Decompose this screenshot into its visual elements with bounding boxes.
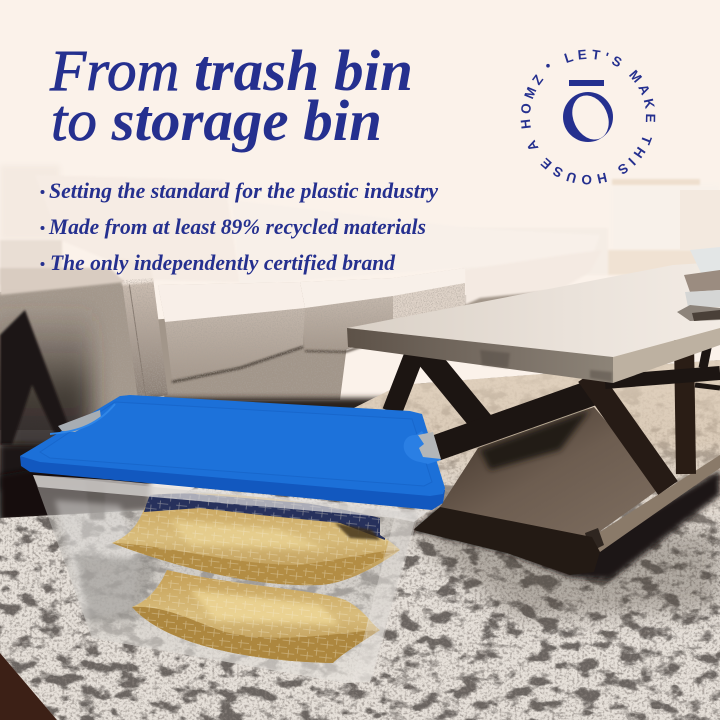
shelf front edge [582,455,720,552]
top gold pillow [112,493,400,586]
lid top [20,395,445,496]
second cushion [300,278,393,350]
bullet 2: Made from at least 89% recycled materials [48,214,426,239]
coffee table [347,262,720,580]
storage bin [20,395,445,683]
bin body, clear plastic [33,475,417,683]
bottom gold pillow [132,570,380,663]
slogan dot [546,64,550,68]
sofa back cushions [35,175,240,282]
right latch [404,431,441,464]
lid lip [20,456,445,510]
bullet list [40,178,438,275]
title: to storage bin [51,88,382,153]
lid inner recess [40,402,432,486]
bin rim under lid [33,475,428,522]
third cushion [393,268,465,333]
table legs [392,338,720,488]
stack of books [677,247,720,321]
far cushion [465,250,602,305]
bullet 3: The only independently certified brand [50,250,396,275]
side table, dark and faded [0,240,395,525]
wood floor [0,653,57,720]
bullet 1: Setting the standard for the plastic industry [49,178,438,203]
sofa base [150,285,590,400]
table shadow [413,470,720,580]
left latch [58,410,101,432]
logo mark: o with macron [563,80,616,146]
title: From trash bin [49,38,413,103]
fabric texture [122,278,465,396]
logo badge [520,50,656,184]
rug [0,355,720,720]
side panel and sofa arm [0,280,150,430]
title [49,38,413,153]
sofa [0,258,549,430]
table top surface [347,262,720,357]
circular slogan: LET'S MAKE THIS HOUSE A HOMZ [520,50,656,184]
table top edges [347,328,613,383]
front cushion [158,282,305,380]
lower shelf [438,407,662,537]
